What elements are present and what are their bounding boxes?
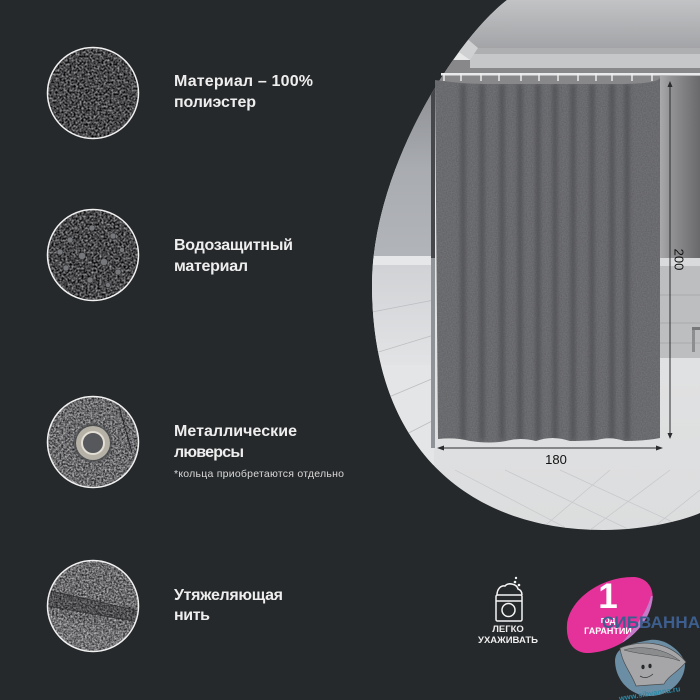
label: Металлические [174,423,297,440]
watermark: Sibvanna logo [602,596,700,700]
curtain rings [444,73,652,81]
curtain [430,74,665,446]
warranty badge [567,577,653,653]
label: easy care: ЛЕГКО [492,624,524,635]
dimension: height 200 [668,81,686,439]
bathroom photo with curtain [360,0,700,535]
label: люверсы [174,444,244,461]
grommet swatch [47,396,139,488]
footnote: *кольца приобретаются отдельно [174,468,344,480]
feature: waterproof [47,209,293,301]
dimension: width 180 [437,446,663,467]
dimension: width 180: 180 [545,452,567,467]
icon: washing machine [496,577,522,621]
hem swatch [47,560,139,652]
warranty badge: ГАРАНТИИ [584,626,632,636]
feature: grommets [47,396,344,488]
feature: weighted thread [47,560,283,652]
label: материал [174,258,248,275]
label: полиэстер [174,94,256,111]
water drops swatch [47,209,139,301]
label: нить [174,607,210,624]
label: Материал – 100% [174,73,313,90]
feature: material [47,47,313,139]
label: easy care: УХАЖИВАТЬ [478,635,538,646]
watermark: Sibvanna logo: СИБВАННА [602,613,700,632]
fabric swatch [47,47,139,139]
dimension: height 200: 200 [672,249,686,270]
warranty badge: 1 [598,577,618,616]
curtain rod [441,73,700,76]
label: Водозащитный [174,237,293,254]
label: Утяжеляющая [174,587,283,604]
warranty badge: год [601,615,616,625]
